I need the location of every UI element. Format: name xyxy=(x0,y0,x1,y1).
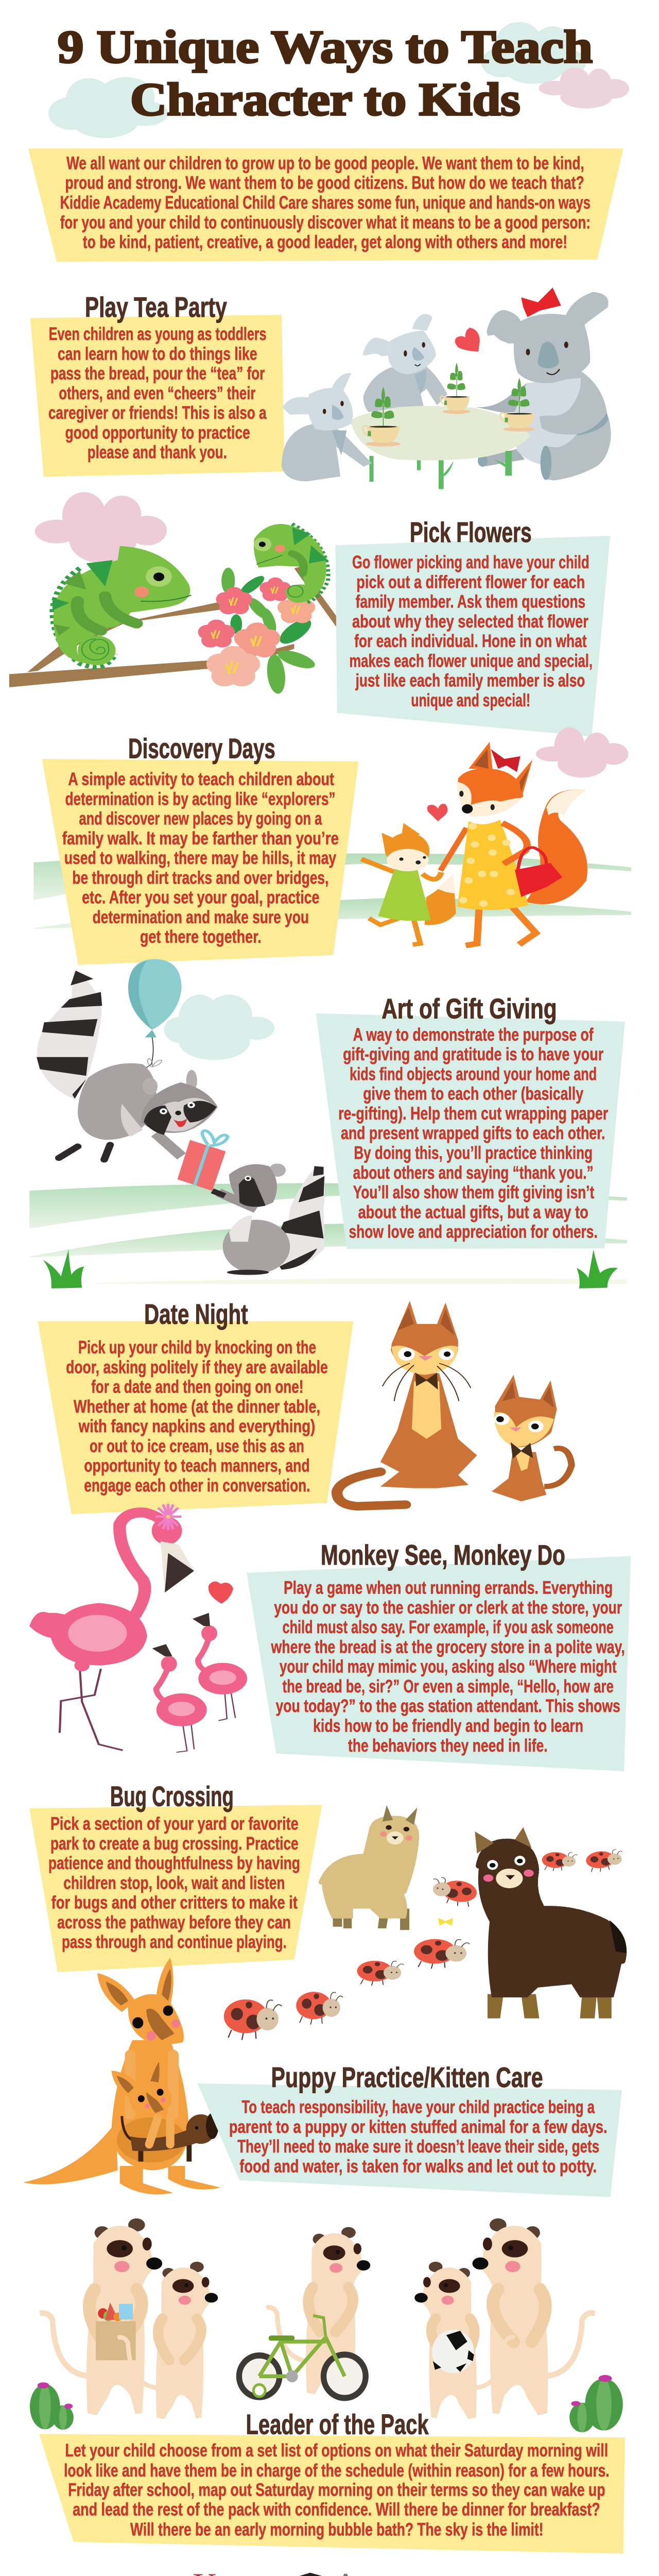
ladybugs: continued xyxy=(224,1992,343,2040)
panel: bug crossing: children stop, look, wait and listen xyxy=(63,1873,285,1893)
title: 9 Unique Ways to Teach xyxy=(58,22,593,73)
icon: soccer ball xyxy=(432,2330,474,2373)
cloud: pink right xyxy=(539,67,629,108)
icon: grass left xyxy=(43,1250,84,1289)
panel: bug crossing xyxy=(29,1805,322,1972)
koala: parent xyxy=(475,292,611,481)
icon: balloon xyxy=(120,959,182,1133)
meerkat: child left xyxy=(117,2262,218,2419)
fox: parent xyxy=(440,742,587,945)
section: monkey see monkey do and bug crossing xyxy=(29,1504,631,2019)
section: pick flowers and discovery days xyxy=(9,492,631,965)
illustration: koalas at a tea table xyxy=(282,287,611,489)
panel: discovery days: determination and make sure you xyxy=(93,907,309,927)
background hills xyxy=(29,1183,627,1284)
joey xyxy=(111,2053,186,2162)
panel: play tea party: caregiver or friends! This is also a xyxy=(48,403,267,423)
kangaroo body xyxy=(97,1958,189,2170)
icon: cactus left xyxy=(30,2382,74,2430)
panel: play tea party: good opportunity to practice xyxy=(65,422,250,443)
panel: puppy practice xyxy=(198,2083,622,2197)
panel: date night: Whether at home (at the dinner table, xyxy=(74,1397,320,1417)
section: art of gift giving and date night xyxy=(29,959,627,1514)
section: header and play tea party xyxy=(28,22,629,477)
kangaroo tail xyxy=(23,2123,118,2184)
panel: date night: Pick up your child by knocking on the xyxy=(78,1337,316,1358)
cat: child xyxy=(492,1375,571,1501)
icon: bicycle xyxy=(239,2315,366,2398)
panel: date night: door, asking politely if they are available xyxy=(66,1357,328,1377)
section: puppy practice and leader of the pack xyxy=(23,1958,625,2576)
panel: discovery days xyxy=(42,759,358,965)
panel: play tea party: others, and even “cheers” their xyxy=(59,383,256,403)
cat: adult xyxy=(337,1301,477,1506)
background hills xyxy=(33,854,631,929)
cloud: pink right xyxy=(536,727,628,777)
panel: introduction xyxy=(28,148,623,262)
panel: leader of the pack: Will there be an early morning bubble bath? The sky is the limit! xyxy=(130,2519,543,2539)
raccoon: child xyxy=(212,1163,325,1275)
meerkat: adult right xyxy=(473,2218,595,2415)
meerkat: child right xyxy=(414,2262,515,2419)
panel: date night: with fancy napkins and everything) xyxy=(78,1416,315,1436)
table xyxy=(350,406,530,489)
cloud: pink large xyxy=(35,492,167,564)
icon: heart xyxy=(209,1582,233,1604)
icon: heart xyxy=(427,804,447,821)
panel: art of gift giving xyxy=(316,1013,625,1249)
panel: date night: engage each other in conversation. xyxy=(84,1476,310,1496)
heading: discovery days: Discovery Days xyxy=(128,733,275,765)
panel: date night: for a date and then going on one! xyxy=(91,1377,303,1397)
meerkat: middle xyxy=(266,2227,370,2394)
logo: kiddie academy xyxy=(193,2567,461,2576)
koala: parent front arm xyxy=(540,416,577,434)
branches xyxy=(9,567,336,687)
chameleon: small xyxy=(254,524,328,603)
illustration: fox parent and child xyxy=(361,742,587,945)
chameleon: large xyxy=(53,546,191,667)
koala: middle child xyxy=(362,314,447,412)
panel: date night: or out to ice cream, use this as an xyxy=(90,1436,304,1456)
koala: small child xyxy=(282,373,372,481)
icon: cactus right xyxy=(569,2375,623,2432)
heading: puppy practice: Puppy Practice/Kitten Care xyxy=(271,2062,543,2093)
panel: leader of the pack xyxy=(39,2434,625,2554)
panel: date night: opportunity to teach manners, and xyxy=(84,1455,310,1476)
panel: play tea party xyxy=(30,315,285,477)
panel: discovery days: determination is by acting like “explorers” xyxy=(65,789,335,809)
panel: pick flowers xyxy=(335,536,610,737)
icon: heart xyxy=(455,328,480,352)
fox: child xyxy=(361,823,456,944)
illustration: chameleons on a flowering branch xyxy=(9,524,336,694)
heading: bug crossing: Bug Crossing xyxy=(110,1781,234,1812)
panel: discovery days: get there together. xyxy=(140,927,262,947)
panel: discovery days: family walk. It may be farther than you’re xyxy=(62,828,339,849)
panel: play tea party: Even children as young as toddlers xyxy=(49,324,267,344)
panel: discovery days: A simple activity to teach children about xyxy=(68,769,334,789)
icon: grass right xyxy=(577,1250,618,1289)
illustration: flamingo family xyxy=(29,1504,247,1752)
panel: bug crossing: patience and thoughtfulness by having xyxy=(48,1853,300,1873)
panel: discovery days: used to walking, there may be hills, it may xyxy=(64,848,336,868)
flamingo: chick one xyxy=(152,1644,207,1752)
cloud: teal xyxy=(164,995,274,1060)
panel: discovery days: be through dirt tracks and over bridges, xyxy=(72,868,328,888)
raccoon: adult flying xyxy=(37,971,218,1160)
icon: yellow bow xyxy=(438,1918,453,1926)
meerkat: adult with groceries xyxy=(40,2218,162,2415)
heading: play tea party: Play Tea Party xyxy=(85,292,227,323)
illustration: kangaroo with joey and dachshund xyxy=(23,1958,221,2194)
icon: dachshund xyxy=(122,2113,218,2162)
heading: pick flowers: Pick Flowers xyxy=(410,517,532,548)
panel: discovery days: etc. After you set your goal, practice xyxy=(82,887,319,907)
flamingo: parent xyxy=(29,1504,194,1750)
panel: date night xyxy=(38,1321,354,1514)
heading: date night: Date Night xyxy=(144,1299,248,1330)
cloud: teal left xyxy=(48,77,168,138)
title xyxy=(58,22,593,125)
panel: bug crossing: pass through and continue playing. xyxy=(62,1932,287,1952)
panel: pick flowers: unique and special! xyxy=(411,690,530,710)
leaves xyxy=(221,568,318,694)
cloud: teal right xyxy=(481,22,586,84)
icon: red bow xyxy=(521,287,561,317)
alpaca: brown xyxy=(475,1827,627,2019)
ladybugs xyxy=(357,1849,626,1986)
kangaroo feet xyxy=(120,2166,221,2194)
alpaca: tan xyxy=(321,1805,418,1930)
panel: play tea party: can learn how to do things like xyxy=(58,344,257,364)
panel: play tea party: please and thank you. xyxy=(88,442,227,463)
panel: bug crossing: across the pathway before they can xyxy=(57,1912,291,1933)
panel: bug crossing: Pick a section of your yard or favorite xyxy=(50,1814,299,1834)
panel: monkey see monkey do xyxy=(247,1556,631,1771)
flowers xyxy=(198,578,315,686)
teacups with plants xyxy=(363,363,535,447)
illustration: alpacas and ladybugs xyxy=(321,1805,627,2019)
panel: bug crossing: for bugs and other critters to make it xyxy=(51,1892,298,1912)
icon: graduation cap xyxy=(287,2573,332,2576)
panel: play tea party: pass the bread, pour the “tea” for xyxy=(50,363,265,383)
flamingo: chick two xyxy=(193,1613,247,1721)
panel: discovery days: and discover new places by going on a xyxy=(79,808,322,828)
heading: leader of the pack: Leader of the Pack xyxy=(246,2409,429,2440)
title: Character to Kids xyxy=(130,74,521,125)
illustration: two cats with bow ties xyxy=(337,1301,571,1506)
illustration: meerkat family xyxy=(30,2218,623,2432)
panel: bug crossing: park to create a bug crossing. Practice xyxy=(50,1834,299,1854)
icon: gift xyxy=(177,1131,228,1191)
